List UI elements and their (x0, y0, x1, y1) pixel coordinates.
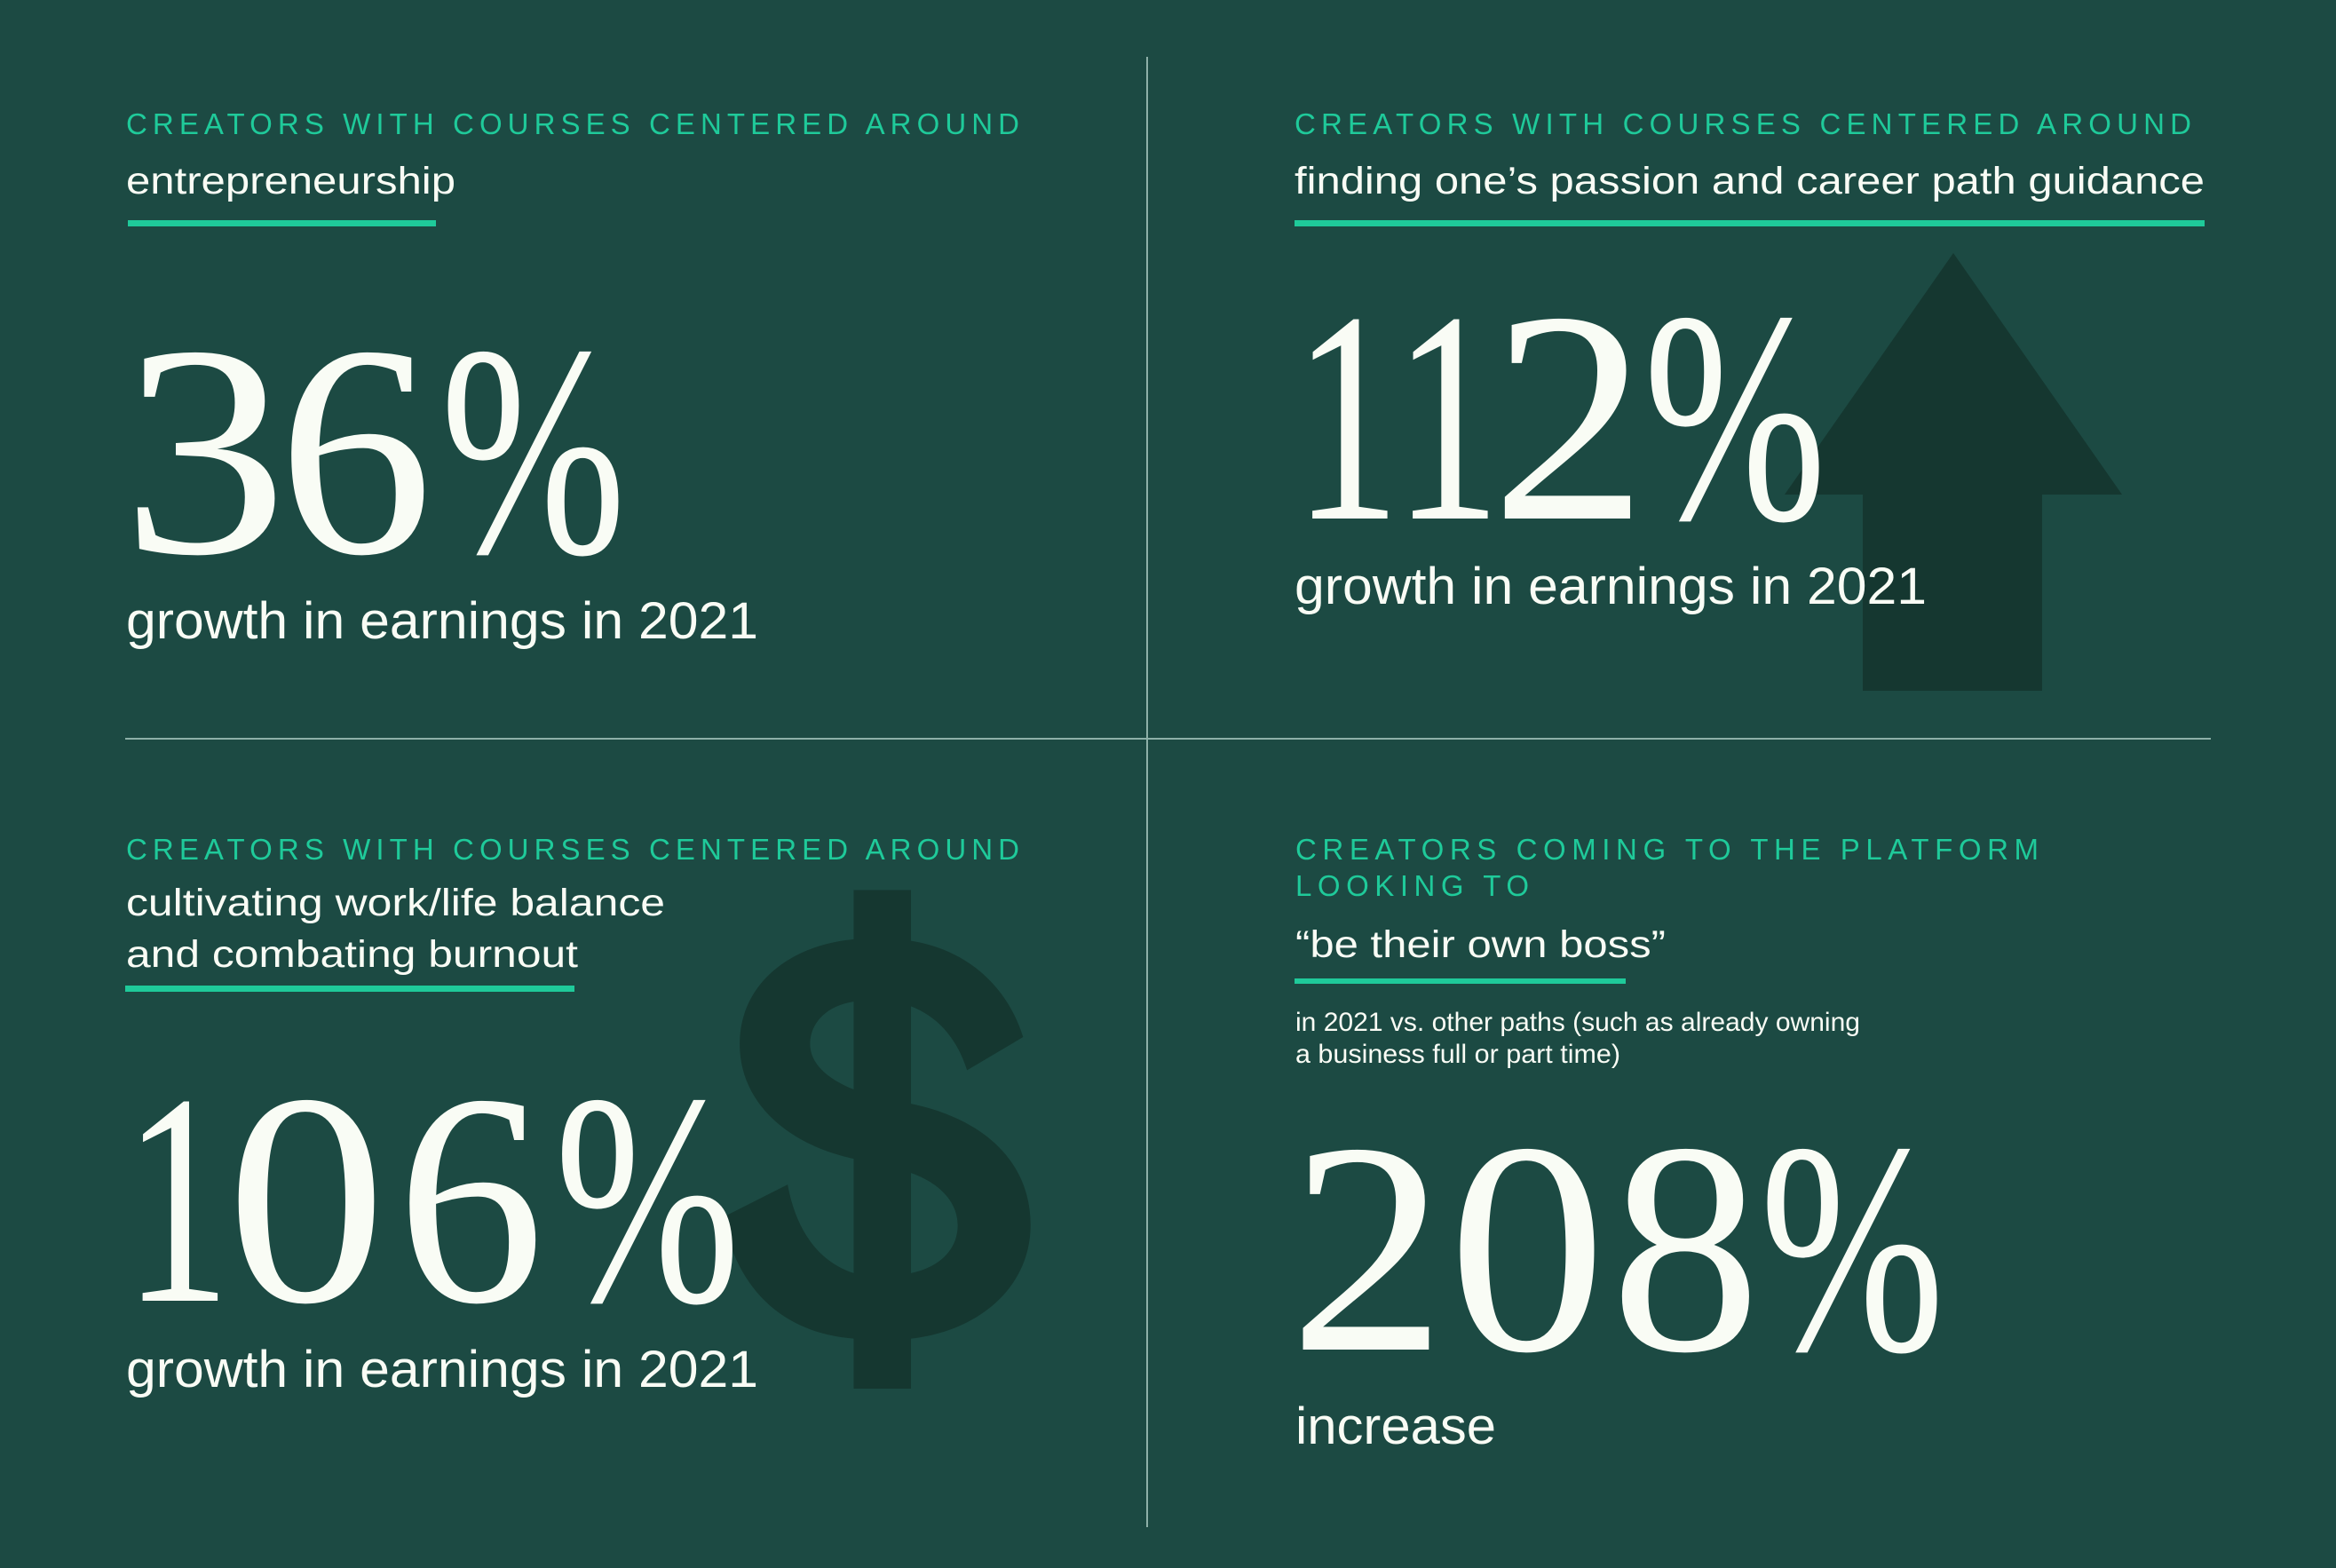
eyebrow label: CREATORS WITH COURSES CENTERED AROUND (126, 833, 1019, 866)
icon: dollar sign (723, 890, 1031, 1389)
big number 36% (122, 283, 626, 618)
topic heading: finding one’s passion and career path guidance (1295, 160, 2205, 202)
big number 112% (1294, 249, 1826, 584)
growth caption: growth in earnings in 2021 (126, 592, 758, 650)
increase caption: increase (1295, 1398, 1496, 1455)
accent underline (128, 220, 436, 226)
topic heading line 1: cultivating work/life balance (126, 882, 665, 924)
panel: be their own boss (1289, 833, 2039, 1455)
accent underline (1295, 978, 1626, 984)
icon: up arrow (1785, 253, 2122, 691)
note line 2: a business full or part time) (1295, 1040, 1620, 1069)
panel: work/life balance (124, 833, 1031, 1398)
topic heading: entrepreneurship (126, 160, 455, 202)
big number 208%: % (1760, 1081, 1944, 1415)
panel: finding one's passion (1294, 107, 2205, 691)
big number 112%: 1 (1394, 249, 1501, 584)
big number 106% (124, 1032, 740, 1366)
big number 208%: 0 (1448, 1081, 1606, 1415)
big number 106%: 1 (124, 1032, 231, 1366)
big number 36%: 3 (122, 283, 288, 618)
big number 106%: 0 (226, 1032, 386, 1366)
accent underline (1295, 220, 2205, 226)
big number 208% (1289, 1081, 1944, 1415)
eyebrow label: CREATORS WITH COURSES CENTERED AROUND (126, 107, 1019, 140)
big number 112%: % (1643, 249, 1826, 584)
panel: entrepreneurship (122, 107, 1019, 650)
eyebrow label: CREATORS WITH COURSES CENTERED AROUND (1295, 107, 2191, 140)
growth caption: growth in earnings in 2021 (126, 1341, 758, 1398)
big number 106%: % (554, 1032, 740, 1366)
eyebrow label line 1: CREATORS COMING TO THE PLATFORM (1295, 833, 2039, 866)
big number 106%: 6 (397, 1032, 544, 1366)
big number 36%: % (440, 283, 626, 618)
note line 1: in 2021 vs. other paths (such as already owning (1295, 1008, 1860, 1037)
topic heading: “be their own boss” (1295, 923, 1666, 966)
topic heading line 2: and combating burnout (126, 933, 578, 976)
big number 112%: 1 (1294, 249, 1400, 584)
accent underline (125, 986, 574, 992)
eyebrow label line 2: LOOKING TO (1295, 869, 1529, 902)
big number 112%: 2 (1491, 249, 1647, 584)
growth caption: growth in earnings in 2021 (1295, 558, 1927, 615)
big number 208%: 2 (1289, 1081, 1446, 1415)
big number 36%: 6 (278, 283, 433, 618)
big number 208%: 8 (1611, 1081, 1761, 1415)
